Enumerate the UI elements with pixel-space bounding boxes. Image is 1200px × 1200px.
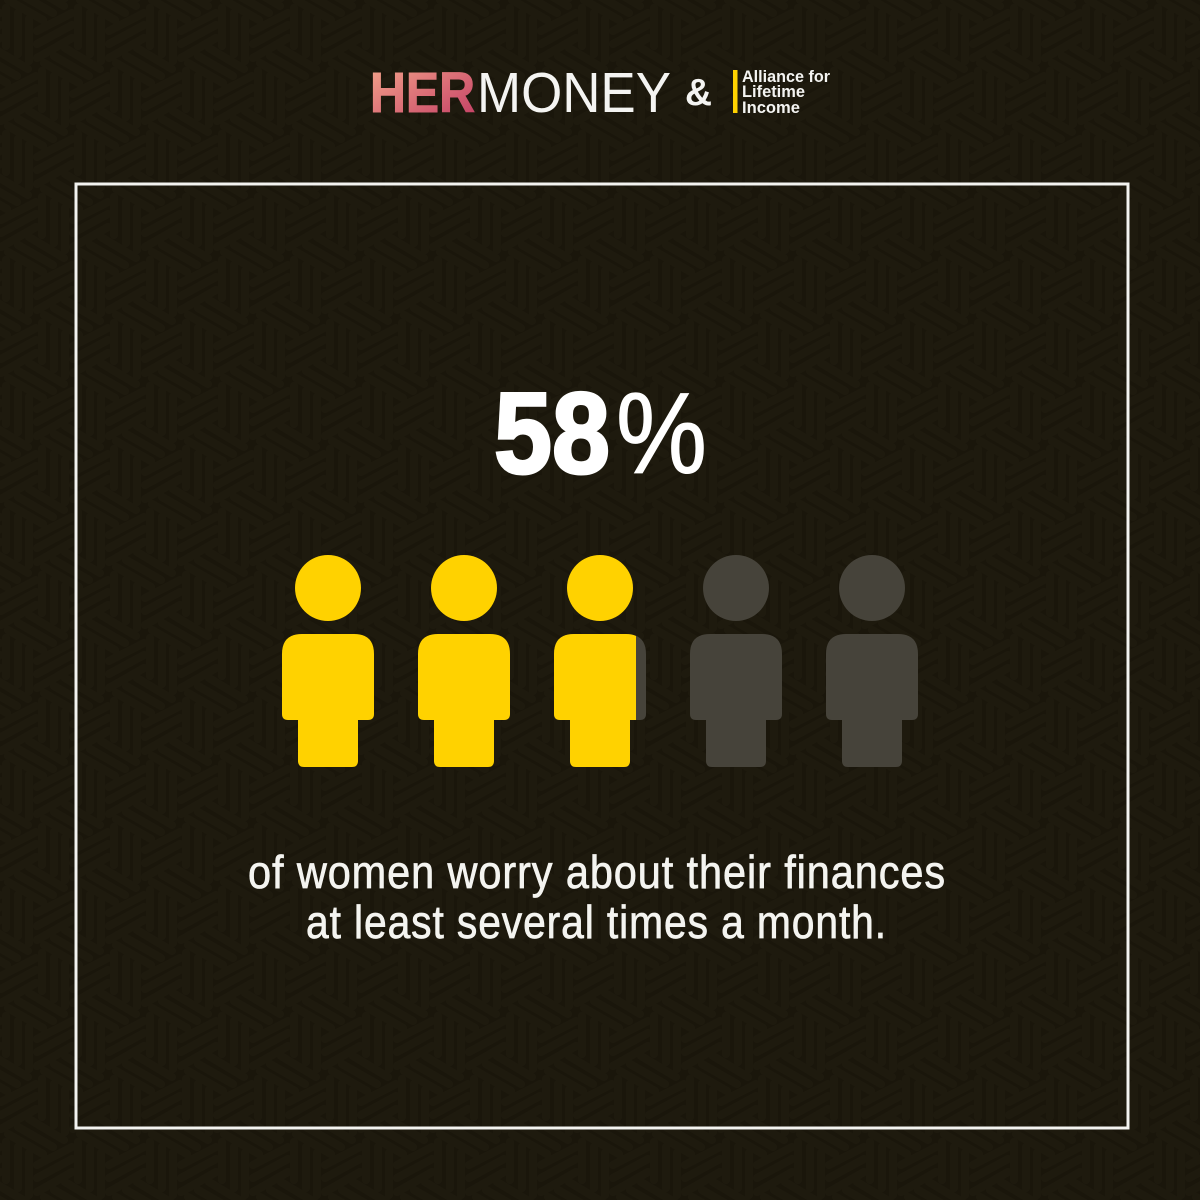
logo: HerMoney: MONEY — [477, 61, 671, 125]
pictogram: 58 percent of people — [282, 555, 918, 767]
frame — [76, 184, 1128, 1128]
logo: Alliance for Lifetime Income: Income — [742, 99, 800, 117]
description text: at least several times a month. — [306, 896, 887, 948]
ampersand: & — [685, 72, 712, 114]
person 2 filled — [418, 555, 510, 767]
logo: Alliance for Lifetime Income: Lifetime — [742, 83, 805, 101]
logo: HerMoney: HER — [370, 61, 475, 125]
logo: Alliance for Lifetime Income — [733, 68, 831, 117]
headline statistic: % — [616, 370, 707, 498]
person 1 filled — [282, 555, 374, 767]
headline statistic: 58 — [494, 370, 610, 498]
logo: HerMoney — [370, 61, 671, 125]
headline statistic — [494, 370, 707, 498]
description text: of women worry about their finances — [248, 846, 946, 898]
person 4 empty — [690, 555, 782, 767]
logo: Alliance for Lifetime Income: Alliance for — [742, 68, 831, 86]
person 5 empty — [826, 555, 918, 767]
description text — [248, 846, 946, 948]
person 3 partly filled — [554, 555, 646, 767]
